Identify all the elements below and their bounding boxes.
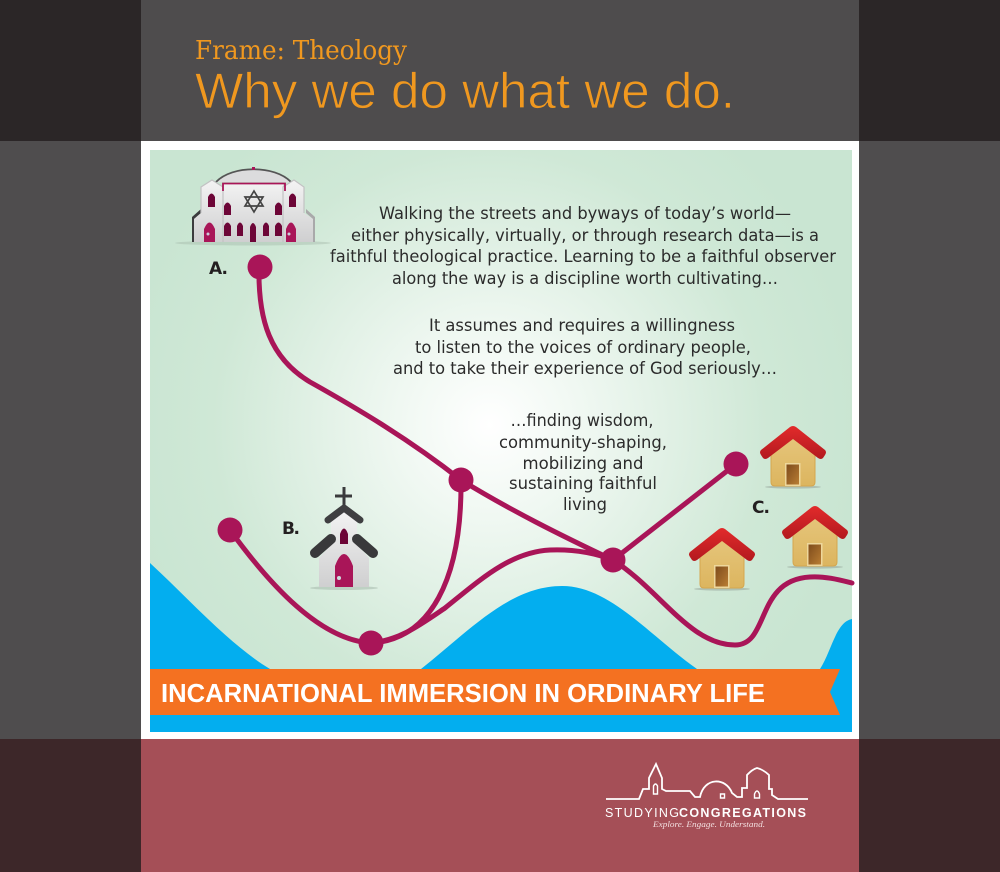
text block: willingness: It assumes and requires a willingness xyxy=(429,316,735,335)
logo: Studying Congregations: Explore. Engage. Understand. xyxy=(652,819,765,829)
text block: finding wisdom xyxy=(499,411,667,514)
title: Frame: Theology xyxy=(195,36,407,66)
logo: Studying Congregations xyxy=(605,764,808,829)
text block: walking the streets: either physically, virtually, or through research data—is a xyxy=(351,226,819,245)
title xyxy=(195,36,735,119)
location labels xyxy=(209,259,770,539)
location labels: B. xyxy=(282,519,300,539)
text block: walking the streets xyxy=(330,204,836,288)
text block: finding wisdom: …finding wisdom, xyxy=(510,411,654,430)
text block: walking the streets: faithful theological practice. Learning to be a faithful observer xyxy=(330,247,836,266)
icon: houses xyxy=(689,426,848,591)
logo: Studying Congregations: CONGREGATIONS xyxy=(679,806,806,820)
banner xyxy=(150,669,840,715)
icon: synagogue xyxy=(175,167,331,246)
location labels: A. xyxy=(209,259,228,279)
logo: Studying Congregations: STUDYING xyxy=(605,806,679,820)
text block: willingness: to listen to the voices of ordinary people, xyxy=(415,338,751,357)
text block: finding wisdom: living xyxy=(563,495,607,514)
blue hills xyxy=(150,563,852,732)
text block: walking the streets: along the way is a discipline worth cultivating… xyxy=(392,269,778,288)
icon: church xyxy=(310,487,378,590)
path nodes xyxy=(218,254,748,656)
text block: finding wisdom: mobilizing and xyxy=(522,454,644,473)
text block: willingness: and to take their experience of God seriously… xyxy=(393,359,777,378)
banner: INCARNATIONAL IMMERSION IN ORDINARY LIFE xyxy=(161,678,765,708)
text block: willingness xyxy=(393,316,777,378)
panel: illustration xyxy=(141,141,859,739)
text block: finding wisdom: community-shaping, xyxy=(499,433,667,452)
path network xyxy=(230,267,852,645)
text block: walking the streets: Walking the streets and byways of today’s world— xyxy=(379,204,791,223)
title: Why we do what we do. xyxy=(195,63,735,119)
location labels: C. xyxy=(752,498,770,518)
text block: finding wisdom: sustaining faithful xyxy=(509,474,657,493)
